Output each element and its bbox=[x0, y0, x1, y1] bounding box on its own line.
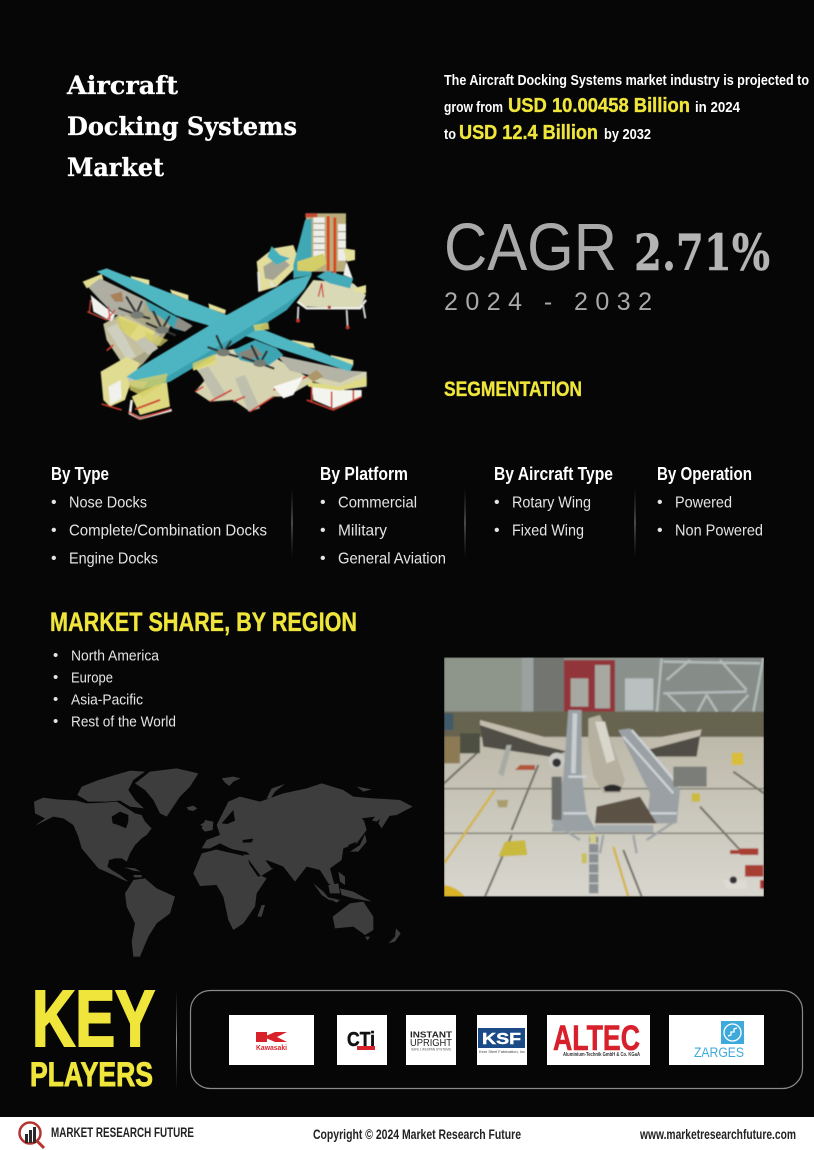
logo: ALTEC: ALTEC bbox=[553, 1019, 640, 1058]
segment column: by platform: • bbox=[320, 550, 326, 567]
CAGR figure: 2024 - 2032 bbox=[444, 288, 652, 316]
segment column: by platform: Commercial bbox=[338, 494, 417, 512]
market projection text: grow from bbox=[444, 100, 503, 116]
docking gantries bbox=[552, 710, 597, 832]
logo: Instant Upright: SAFE LIFESPAN SYSTEMS bbox=[411, 1048, 452, 1052]
logo: CTi: CTi bbox=[347, 1029, 375, 1051]
region list: • bbox=[53, 713, 58, 730]
segment column: by type: Engine Docks bbox=[69, 550, 158, 568]
inland seas bbox=[109, 810, 375, 877]
key players panel bbox=[190, 990, 802, 1088]
footer bar: Copyright © 2024 Market Research Future bbox=[313, 1127, 521, 1142]
heading: segmentation: SEGMENTATION bbox=[444, 378, 582, 401]
segment column: by operation: • bbox=[657, 522, 663, 539]
logo: KSF bbox=[477, 1015, 527, 1065]
rear dock platform bbox=[296, 280, 366, 329]
segment column: by platform bbox=[320, 464, 446, 568]
segment column: by aircraft type: By Aircraft Type bbox=[494, 464, 613, 484]
segment column: by operation: • bbox=[657, 494, 663, 511]
title: Docking Systems bbox=[67, 112, 297, 141]
logo: KSF: KSF bbox=[482, 1031, 521, 1048]
logo: Instant Upright: UPRIGHT bbox=[410, 1037, 453, 1049]
segment column: by operation: By Operation bbox=[657, 464, 752, 484]
equipment on floor bbox=[498, 840, 527, 857]
logo: Kawasaki: Kawasaki bbox=[256, 1045, 287, 1052]
left wing dock bbox=[83, 274, 226, 373]
segment column: by aircraft type: • bbox=[494, 494, 500, 511]
region list bbox=[53, 647, 176, 730]
logo: Zarges bbox=[669, 1015, 764, 1065]
title bbox=[66, 71, 297, 182]
CAGR figure bbox=[444, 210, 770, 316]
footer bar bbox=[0, 1117, 814, 1150]
title: Market bbox=[67, 153, 164, 182]
market projection text: USD 10.00458 Billion bbox=[508, 95, 690, 117]
segment column: by platform: By Platform bbox=[320, 464, 408, 484]
footer bar: MARKET RESEARCH FUTURE bbox=[51, 1125, 194, 1140]
segment column: by type: By Type bbox=[51, 464, 109, 484]
logo: Instant Upright bbox=[406, 1015, 456, 1065]
market projection text bbox=[444, 73, 809, 144]
market projection text: by 2032 bbox=[604, 127, 651, 143]
region list: • bbox=[53, 669, 58, 686]
region list: North America bbox=[71, 648, 160, 664]
title: Aircraft bbox=[66, 71, 178, 100]
aircraft fuselage bbox=[127, 275, 312, 389]
logo: Instant Upright: INSTANT bbox=[410, 1030, 452, 1040]
illustration: aircraft in docking platforms bbox=[83, 213, 367, 418]
region list: Europe bbox=[71, 670, 113, 686]
segment column: by platform: Military bbox=[338, 522, 387, 540]
nose dock bbox=[101, 357, 172, 418]
market projection text: to bbox=[444, 127, 456, 143]
CAGR figure: CAGR bbox=[444, 210, 617, 285]
segment column: by operation: Powered bbox=[675, 494, 732, 512]
photo: aircraft in hangar docking system bbox=[444, 657, 764, 897]
logo: KSF: Kern Steel Fabrication, Inc bbox=[479, 1049, 525, 1054]
segment column: by type: • bbox=[51, 494, 57, 511]
segment column: by type: • bbox=[51, 522, 57, 539]
logo: ALTEC: Aluminium-Technik GmbH & Co. KGaA bbox=[563, 1052, 640, 1058]
segment column: by platform: • bbox=[320, 522, 326, 539]
market projection text: USD 12.4 Billion bbox=[459, 122, 598, 144]
tail dock tower bbox=[257, 213, 355, 292]
right wing docks bbox=[192, 340, 367, 412]
propellers bbox=[119, 297, 273, 368]
segment column: by type: Complete/Combination Docks bbox=[69, 522, 267, 540]
region list: Rest of the World bbox=[71, 714, 176, 730]
hangar wall bbox=[444, 657, 662, 713]
segment column: by platform: • bbox=[320, 494, 326, 511]
segment column: by aircraft type: Fixed Wing bbox=[512, 522, 584, 540]
aircraft wings bbox=[480, 725, 567, 757]
heading: market share by region: MARKET SHARE, BY REGION bbox=[50, 607, 357, 637]
region list: • bbox=[53, 691, 58, 708]
logo: CTi bbox=[337, 1015, 387, 1065]
segment column: by aircraft type: Rotary Wing bbox=[512, 494, 591, 512]
heading: key players: PLAYERS bbox=[30, 1056, 153, 1094]
market projection text: in 2024 bbox=[695, 100, 740, 116]
heading: key players bbox=[30, 974, 155, 1094]
region list: Asia-Pacific bbox=[71, 692, 143, 708]
region list: • bbox=[53, 647, 58, 664]
world map bbox=[34, 768, 413, 957]
segment column: by operation: Non Powered bbox=[675, 522, 763, 540]
segment column: by type: • bbox=[51, 550, 57, 567]
segment column: by aircraft type bbox=[494, 464, 613, 540]
segment column: by operation bbox=[657, 464, 763, 540]
segment column: by aircraft type: • bbox=[494, 522, 500, 539]
logo: Kawasaki bbox=[229, 1015, 314, 1065]
heading: key players: KEY bbox=[32, 974, 155, 1063]
aircraft wings and tail bbox=[97, 218, 353, 372]
engine nacelles bbox=[131, 311, 267, 367]
segment column: by platform: General Aviation bbox=[338, 550, 446, 568]
logo: Zarges: ZARGES bbox=[694, 1045, 744, 1060]
CAGR figure: 2.71% bbox=[634, 223, 770, 282]
logo: ALTEC bbox=[547, 1015, 650, 1065]
footer logo icon bbox=[20, 1122, 44, 1148]
segment column: by type bbox=[51, 464, 267, 568]
yellow dock rails bbox=[117, 253, 327, 397]
fuselage bbox=[588, 715, 625, 793]
hangar floor bbox=[444, 737, 764, 897]
segment column: by type: Nose Docks bbox=[69, 494, 147, 512]
